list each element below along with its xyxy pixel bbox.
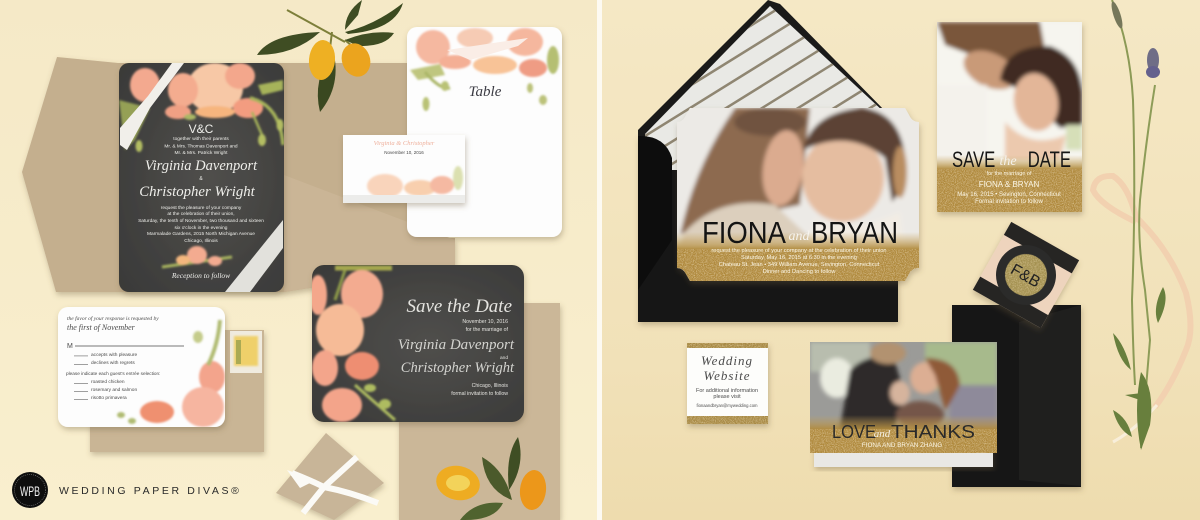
invitation text: Chicago, Illinois xyxy=(184,238,218,244)
ribbon xyxy=(1093,176,1190,442)
main invitation card: request the pleasure of your company at the celebration of their union xyxy=(711,248,887,254)
save the date envelope xyxy=(399,303,560,520)
reply card: risotto primavera xyxy=(91,395,127,401)
invitation text: Virginia Davenport xyxy=(145,158,258,174)
main invitation card: and xyxy=(788,229,810,244)
invitation text: Mr. & Mrs. Patrick Wright xyxy=(175,150,228,156)
website card: please visit xyxy=(713,394,741,400)
lavender sprigs xyxy=(1109,0,1166,450)
save the date card: and xyxy=(500,355,508,361)
logo: Wedding Paper Divas: WEDDING PAPER DIVAS® xyxy=(59,485,241,497)
invitation text xyxy=(138,122,264,280)
thank you card: FIONA AND BRYAN ZHANG xyxy=(862,442,942,449)
invitation text: & xyxy=(199,176,203,182)
seal box: F&B xyxy=(1008,261,1043,291)
place card: November 10, 2016 xyxy=(384,150,424,155)
pocket folder xyxy=(22,57,455,292)
panel: gold glitter photo suite xyxy=(636,0,1194,493)
save the date card: Christopher Wright xyxy=(401,360,515,376)
thank you card xyxy=(810,342,997,467)
save the date card: SAVE DATE xyxy=(952,147,1071,172)
place card: Virginia & Christopher xyxy=(374,140,435,147)
reply card: declines with regrets xyxy=(91,360,135,366)
save the date card: Chicago, Illinois xyxy=(472,383,508,389)
table card: Table xyxy=(469,84,502,100)
website card: Wedding xyxy=(701,353,753,368)
reply envelope xyxy=(90,330,264,452)
website card xyxy=(687,343,768,424)
small bouquet xyxy=(162,246,232,267)
save the date card: FIONA & BRYAN xyxy=(979,180,1040,189)
place card xyxy=(343,135,465,203)
reply card: the favor of your response is requested by xyxy=(67,315,159,322)
invitation text: together with their parents xyxy=(173,136,229,142)
reply card: accepts with pleasure xyxy=(91,352,137,358)
kumquats and leaves xyxy=(433,437,548,520)
website card: Website xyxy=(704,368,750,383)
table card xyxy=(407,27,562,237)
invitation text: Reception to follow xyxy=(171,271,230,280)
gift box xyxy=(276,433,384,520)
invitation text: Christopher Wright xyxy=(139,184,256,200)
main invitation card: Saturday, May 16, 2015 at 6:30 in the evening xyxy=(741,255,857,261)
main invitation card: Dinner and Dancing to follow xyxy=(763,269,836,275)
save the date card: May 16, 2015 • Sevington, Connecticut xyxy=(957,192,1061,198)
thank you card: LOVE xyxy=(832,422,876,442)
main invitation card: Chateau St. Jean • 349 William Avenue, Sevington, Connecticut xyxy=(719,262,880,268)
thank you card: THANKS xyxy=(891,422,975,442)
couple photo xyxy=(937,22,1082,167)
flowers xyxy=(119,63,284,152)
main invitation card: BRYAN xyxy=(811,216,898,250)
save the date card: the xyxy=(999,154,1017,169)
invitation text: Saturday, the tenth of November, two thousand and sixteen xyxy=(138,218,264,224)
logo: Wedding Paper Divas: WPB xyxy=(20,483,40,499)
thank you card: and xyxy=(874,428,891,440)
seal box xyxy=(973,222,1079,328)
kumquat branch xyxy=(257,0,403,112)
invitation text: Mr. & Mrs. Thomas Davenport and xyxy=(164,144,238,150)
save the date card: November 10, 2016 xyxy=(462,319,508,325)
invitation text: request the pleasure of your company xyxy=(161,205,242,211)
black envelope small xyxy=(952,305,1081,487)
invitation text: Marmalade Gardens, 2015 North Michigan Avenue xyxy=(147,231,255,237)
panel: floral chalkboard suite xyxy=(12,0,562,520)
website card: fionaandbryan@mywedding.com xyxy=(696,403,758,408)
save the date card: formal invitation to follow xyxy=(451,391,508,397)
wedding photo xyxy=(810,342,997,429)
save the date card: Virginia Davenport xyxy=(398,337,515,353)
main invitation card xyxy=(677,108,919,281)
couple photo xyxy=(677,108,919,250)
save the date card: Save the Date xyxy=(406,296,512,317)
save the date card: Formal invitation to follow xyxy=(975,199,1044,205)
reply card: please indicate each guest's entrée selection: xyxy=(66,371,160,376)
black envelope with lined flap xyxy=(636,0,902,328)
save the date card xyxy=(309,265,524,422)
website card: For additional information xyxy=(696,388,758,394)
logo: Wedding Paper Divas xyxy=(12,472,241,508)
invitation text: six o'clock in the evening xyxy=(175,225,228,231)
liner stripes xyxy=(645,10,876,166)
reply card: M xyxy=(67,343,73,350)
reply card: roasted chicken xyxy=(91,379,125,385)
stamp xyxy=(230,331,262,373)
save the date card: for the marriage of xyxy=(987,171,1032,177)
save the date card: for the marriage of xyxy=(466,327,509,333)
flowers xyxy=(309,268,395,422)
reply card: rosemary and salmon xyxy=(91,387,137,393)
invitation text: V&C xyxy=(189,122,214,136)
main invitation card xyxy=(119,63,284,292)
invitation text: at the celebration of their union, xyxy=(167,211,235,217)
save the date card xyxy=(937,22,1082,212)
main invitation card: FIONA xyxy=(702,216,787,250)
reply card xyxy=(58,307,225,427)
ribbon xyxy=(120,63,184,150)
leaves xyxy=(1113,287,1166,450)
reply card: the first of November xyxy=(67,323,136,332)
